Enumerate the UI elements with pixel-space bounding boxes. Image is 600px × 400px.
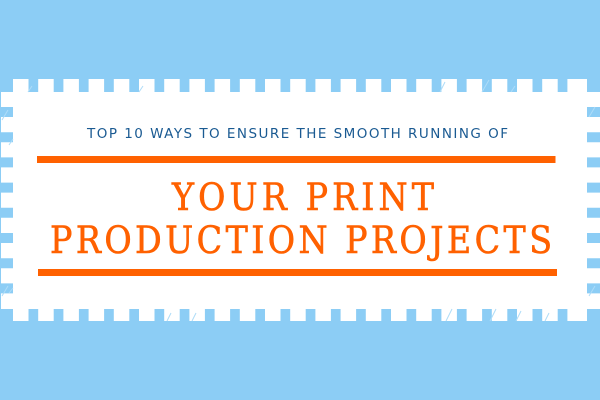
perforated left edge notches — [0, 107, 13, 293]
panel: perforated white stamp — [0, 79, 600, 321]
top orange rule — [37, 156, 556, 163]
perforated right edge notches — [587, 107, 600, 293]
title — [50, 176, 552, 262]
perforated bottom edge — [13, 308, 587, 321]
faint diagonal streaks — [2, 80, 595, 321]
title line 1: YOUR PRINT — [171, 176, 434, 219]
title line 2: PRODUCTION PROJECTS — [50, 219, 552, 262]
bottom orange rule — [38, 269, 557, 276]
subtitle: TOP 10 WAYS TO ENSURE THE SMOOTH RUNNING OF — [86, 126, 508, 142]
perforated top edge — [13, 79, 587, 93]
